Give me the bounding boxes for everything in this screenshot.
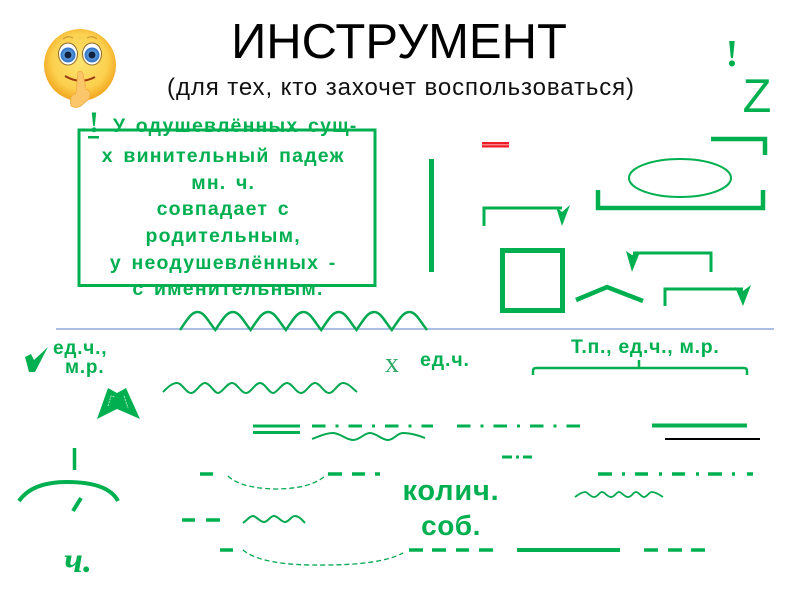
vertical bar [429, 159, 434, 272]
bracket [598, 190, 763, 208]
bottom row line [220, 550, 705, 565]
mark: exclamation: ! [726, 33, 738, 75]
rule text: У одушевлённых сущ- [113, 115, 358, 137]
panel: rule text box [79, 106, 375, 300]
label: singular masculine: ед.ч., [53, 338, 107, 359]
arch symbol [19, 448, 118, 511]
icon: butterfly [97, 388, 140, 419]
dash-dot line 2 [457, 424, 581, 428]
black line [665, 438, 760, 440]
mark: letter Z: Z [743, 69, 771, 122]
double line [253, 424, 300, 434]
rule text: мн. ч. [191, 172, 255, 194]
dashes and short wave row [182, 516, 305, 523]
red double line [482, 142, 509, 148]
wavy line top [180, 312, 427, 330]
warning mark: ! [89, 106, 99, 139]
square [502, 250, 562, 310]
rule text: родительным, [145, 225, 301, 247]
brace [533, 360, 747, 375]
oval [629, 159, 731, 197]
label: singular masculine: м.р. [65, 357, 104, 378]
caret [576, 287, 643, 301]
green line [652, 424, 747, 428]
title: ИНСТРУМЕНТ [231, 15, 567, 69]
icon: check mark [25, 347, 48, 372]
label: case: Т.п., ед.ч., м.р. [571, 336, 719, 358]
icon: shushing smiley [44, 29, 116, 108]
rule text: совпадает с [157, 198, 290, 220]
wavy under dash-dot [312, 433, 425, 440]
dash-dot line 3 [598, 472, 753, 476]
top-right corner [711, 139, 765, 155]
label: possessive: соб. [421, 510, 481, 541]
rule text: х винительный падеж [102, 145, 345, 167]
subtitle: (для тех, кто захочет воспользоваться) [167, 74, 635, 101]
rule text: у неодушевлённых - [110, 252, 337, 274]
short dashes [502, 456, 532, 458]
dash-dot line 1 [312, 424, 433, 428]
arrow 2 [626, 251, 711, 272]
arrow 3 [665, 285, 751, 306]
wavy short right [575, 492, 663, 497]
label: quantitative: колич. [402, 475, 500, 507]
arrow 1 [484, 205, 570, 226]
label: x: х [385, 348, 399, 379]
label: singular: ед.ч. [420, 349, 470, 371]
dash and dashed arc row [200, 474, 380, 489]
divider [56, 328, 774, 330]
rule text: с именительным. [132, 278, 324, 300]
label: particle: ч. [64, 540, 92, 580]
wavy line middle [163, 383, 357, 393]
